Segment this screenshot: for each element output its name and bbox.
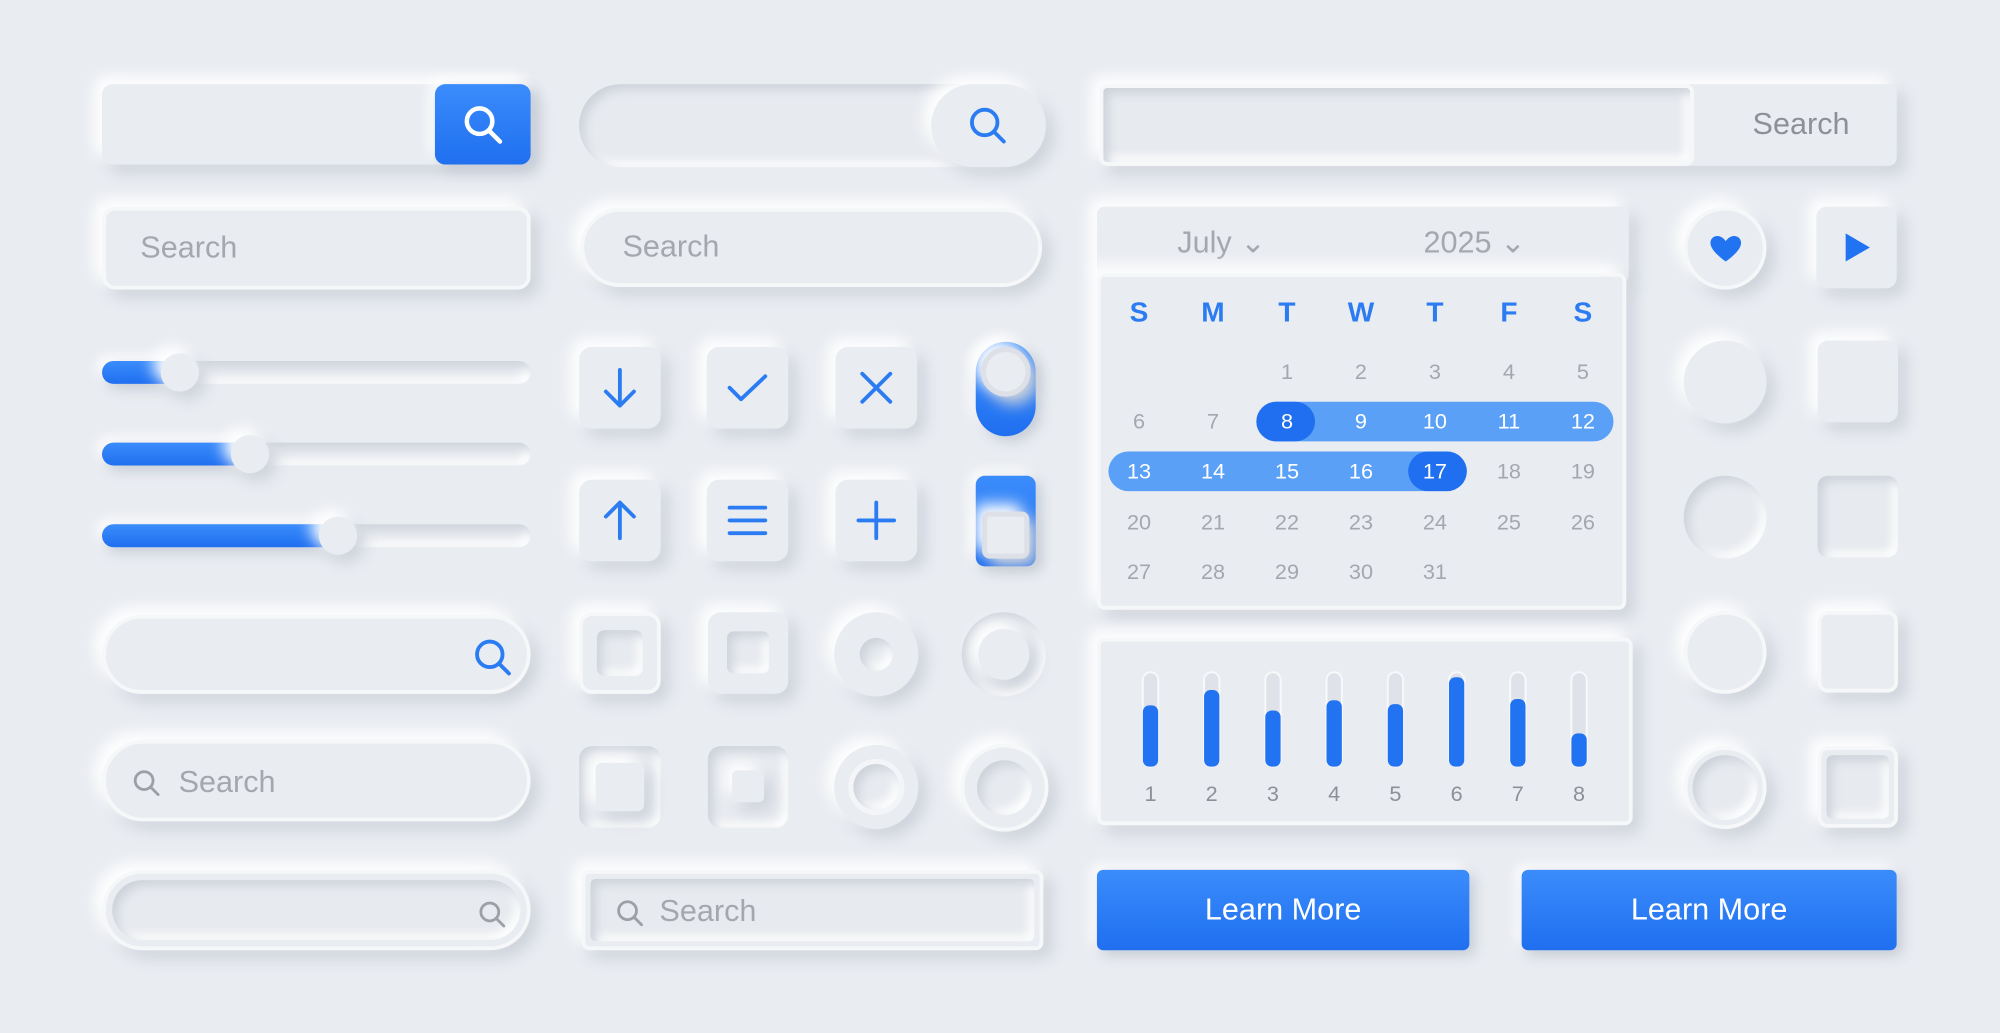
calendar body <box>1097 273 1626 610</box>
calendar body: 23 <box>1349 509 1373 534</box>
radio circles row 2 <box>834 745 918 829</box>
pill search blue icon <box>102 615 531 694</box>
icon: check <box>707 347 788 429</box>
pill search with round button <box>579 84 1046 167</box>
checkbox squares row 1 <box>579 612 661 694</box>
bar chart: 4 <box>1328 781 1340 806</box>
search bar with blue button <box>102 84 531 165</box>
search rect inset: Search <box>659 894 756 929</box>
calendar body: 30 <box>1349 559 1373 584</box>
calendar body: 28 <box>1201 559 1225 584</box>
calendar body: M <box>1201 296 1225 327</box>
slider 3 <box>102 524 531 547</box>
calendar body: 10 <box>1423 409 1447 434</box>
icon: down arrow <box>579 347 661 429</box>
search input rect: Search <box>140 230 237 265</box>
calendar body: 26 <box>1571 509 1595 534</box>
icon: play button <box>1816 207 1897 288</box>
checkbox squares row 2 <box>579 746 661 828</box>
calendar body: 7 <box>1207 409 1219 434</box>
range highlights <box>1256 402 1614 441</box>
calendar body: 5 <box>1577 359 1589 384</box>
icon: plus <box>835 480 917 561</box>
calendar body: T <box>1426 296 1444 327</box>
calendar body: 19 <box>1571 458 1595 483</box>
calendar body: S <box>1130 296 1148 327</box>
calendar body: 12 <box>1571 409 1595 434</box>
radio circles row 1 <box>834 612 918 696</box>
bar chart <box>1097 638 1633 825</box>
calendar body: 11 <box>1498 409 1520 434</box>
calendar body: 2 <box>1355 359 1367 384</box>
calendar <box>1086 196 1642 621</box>
pill search text: Search <box>622 230 719 264</box>
calendar header <box>1097 207 1629 283</box>
calendar body: 25 <box>1497 509 1521 534</box>
icon: close <box>835 347 917 429</box>
button: learn more 2 <box>1522 870 1897 950</box>
calendar header: July ⌄ <box>1177 226 1266 260</box>
pill search with text <box>102 740 531 821</box>
icon: menu <box>707 480 788 561</box>
calendar body: 29 <box>1275 559 1299 584</box>
calendar body: 21 <box>1201 509 1225 534</box>
calendar body: 31 <box>1423 559 1447 584</box>
calendar body: 27 <box>1127 559 1151 584</box>
bar chart: 3 <box>1267 781 1279 806</box>
circles and squares column <box>1674 330 1910 840</box>
calendar header: 2025 ⌄ <box>1423 226 1526 260</box>
bar chart: 2 <box>1206 781 1218 806</box>
icon: up arrow <box>579 480 661 561</box>
calendar body: 13 <box>1127 458 1151 483</box>
calendar body: 16 <box>1349 458 1373 483</box>
wide search bar <box>1099 84 1897 166</box>
calendar body: 4 <box>1503 359 1515 384</box>
icon: heart button <box>1684 207 1767 290</box>
bar chart: 6 <box>1451 781 1463 806</box>
calendar body: 14 <box>1201 458 1225 483</box>
bar chart: 8 <box>1573 781 1585 806</box>
search rect inset <box>582 870 1043 950</box>
slider 2 <box>102 443 531 466</box>
calendar body: 24 <box>1423 509 1447 534</box>
search input rect <box>102 207 531 290</box>
calendar body: T <box>1278 296 1296 327</box>
bar chart: 7 <box>1512 781 1524 806</box>
calendar body: S <box>1574 296 1592 327</box>
calendar body: 22 <box>1275 509 1299 534</box>
bar chart: 5 <box>1389 781 1401 806</box>
pill search with text: Search <box>179 765 276 800</box>
button: learn more 1: Learn More <box>1205 892 1361 927</box>
calendar body: 3 <box>1429 359 1441 384</box>
calendar body: F <box>1500 296 1517 327</box>
toggle on <box>976 342 1036 436</box>
calendar body: 18 <box>1497 458 1521 483</box>
calendar body: 1 <box>1281 359 1293 384</box>
pill search text <box>580 208 1042 287</box>
button: learn more 1 <box>1097 870 1469 950</box>
button: learn more 2: Learn More <box>1631 892 1787 927</box>
bar chart: 1 <box>1144 781 1157 806</box>
wide search bar: Search <box>1753 107 1850 142</box>
calendar body: 15 <box>1275 458 1299 483</box>
calendar body: 9 <box>1355 409 1367 434</box>
calendar body: 20 <box>1127 509 1151 534</box>
icon: search button <box>435 84 531 165</box>
calendar body: W <box>1348 296 1375 327</box>
pill search inset <box>102 870 531 950</box>
calendar body: 6 <box>1133 409 1145 434</box>
calendar body: 8 <box>1281 409 1293 434</box>
toggle square <box>976 476 1036 566</box>
calendar body: 17 <box>1423 458 1447 483</box>
slider 1 <box>102 361 531 384</box>
